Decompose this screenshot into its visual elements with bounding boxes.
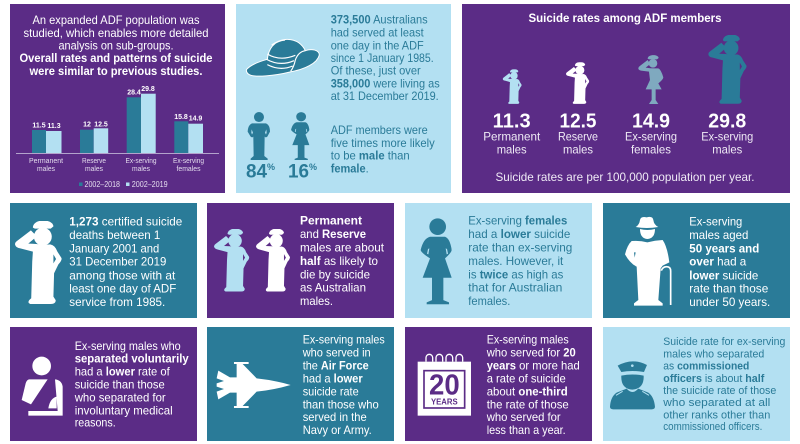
officers text: other ranks other than	[663, 409, 770, 421]
officers text: Suicide rate for ex-serving	[663, 336, 785, 348]
voluntary separation text	[74, 339, 189, 430]
females text: rate than ex-serving	[468, 241, 572, 255]
icon: ex-serving male	[708, 35, 747, 104]
service text: since 1 January 1985.	[331, 51, 434, 65]
panel: served 20 years	[405, 327, 592, 441]
bar chart: Reserve	[82, 156, 106, 165]
deaths text: 31 December 2019	[69, 255, 167, 269]
bar chart: 14.9	[189, 116, 202, 122]
females text: that for Australian	[468, 281, 562, 295]
icon: permanent male	[503, 69, 522, 104]
service length text: Ex-serving males	[487, 332, 569, 346]
officers text	[662, 336, 785, 433]
panel: ADF population facts	[236, 4, 451, 193]
females text: males. However, it	[468, 254, 564, 268]
service text: 358,000 were living as	[331, 76, 440, 90]
service length text	[486, 332, 580, 437]
officers text: males who separated	[663, 348, 764, 360]
bar chart: 15.8	[174, 114, 188, 121]
bar chart: 11.5	[32, 122, 46, 130]
females text: females.	[468, 294, 510, 308]
age text: 50 years and	[689, 241, 759, 255]
rate labels: Permanent	[483, 130, 541, 144]
deaths text: January 2001 and	[69, 241, 159, 255]
officers text: officers is about half	[663, 373, 765, 385]
service length text: less than a year.	[487, 423, 566, 437]
bar chart: Ex-serving	[126, 156, 156, 165]
bar chart: Permanent	[29, 156, 64, 165]
panel: ADF population facts: %	[267, 162, 275, 172]
panel: ex-serving females	[405, 203, 592, 318]
legend	[79, 180, 168, 189]
officers text: as commissioned	[663, 360, 749, 372]
panel: separated voluntarily	[10, 327, 197, 441]
rate labels: Ex-serving	[701, 130, 753, 144]
service text: at 31 December 2019.	[331, 89, 439, 103]
females text	[468, 214, 572, 308]
air force text: served in the	[303, 410, 367, 424]
service text: Of these, just over	[331, 64, 421, 78]
stat: 16 percent: 16	[288, 162, 309, 183]
age text: under 50 years.	[689, 295, 770, 309]
gender text: ADF members were	[331, 123, 428, 137]
comparison text: half as likely to	[300, 254, 378, 268]
bar chart: 12	[83, 122, 91, 128]
voluntary separation text: reasons.	[75, 416, 116, 430]
service length text: who served for	[486, 410, 561, 424]
bar chart: males	[132, 164, 150, 173]
icon: reserve male	[566, 62, 589, 104]
females text: Ex-serving females	[468, 214, 568, 228]
icon: saluting soldier	[15, 220, 62, 304]
rate numbers: 29.8	[708, 110, 746, 132]
comparison text: males.	[300, 294, 333, 308]
gender text: to be male than	[331, 149, 410, 163]
age text: over had a	[689, 255, 747, 269]
service text: had served at least	[331, 26, 424, 40]
rate labels: males	[712, 142, 742, 156]
deaths text: deaths between 1	[69, 228, 161, 242]
panel: males aged 50 and over	[603, 203, 790, 318]
gender text: female.	[331, 161, 369, 175]
service text: 373,500 Australians	[331, 12, 428, 26]
icon: fighter jet	[217, 362, 291, 408]
intro text: Overall rates and patterns of suicide	[20, 51, 213, 65]
icon: permanent soldier	[214, 229, 249, 291]
age text	[689, 215, 770, 309]
air force text: Navy or Army.	[303, 423, 372, 437]
deaths text: among those with at	[69, 268, 176, 282]
icon: 20 years calendar	[418, 354, 471, 416]
service text: one day in the ADF	[331, 38, 424, 52]
rates footnote: Suicide rates are per 100,000 population per year.	[496, 170, 754, 184]
service length text: the rate of those	[487, 397, 569, 411]
panel: certified suicide deaths	[10, 203, 197, 318]
comparison text: males are about	[300, 241, 385, 255]
stat: 84 percent: 84	[246, 162, 267, 183]
rate labels: males	[563, 142, 593, 156]
deaths text	[69, 215, 183, 309]
intro text: analysis on sub-groups.	[58, 38, 174, 52]
service length text: who served for 20	[486, 346, 576, 360]
panel heading: Suicide rates among ADF members	[528, 11, 722, 25]
rate labels: Reserve	[558, 130, 598, 144]
comparison text: as Australian	[300, 281, 366, 295]
panel: commissioned officers	[603, 327, 790, 441]
intro text: An expanded ADF population was	[32, 13, 200, 27]
officers text: who separated at all	[662, 397, 770, 409]
air force text: had a lower	[303, 371, 363, 385]
bar chart: 29.8	[141, 86, 155, 93]
females text: had a lower suicide	[468, 227, 571, 241]
air force text: than those who	[303, 397, 379, 411]
voluntary separation text: who separated for	[74, 390, 166, 404]
rate numbers: 11.3	[493, 110, 531, 132]
air force text: who served in	[302, 346, 371, 360]
comparison text: and Reserve	[300, 227, 366, 241]
age text: rate than those	[689, 282, 769, 296]
voluntary separation text: Ex-serving males who	[75, 339, 181, 353]
bar chart: 28.4	[127, 90, 141, 96]
gender text	[331, 123, 435, 175]
rate numbers: 12.5	[560, 110, 596, 132]
bar chart: males	[85, 164, 103, 173]
deaths text: least one day of ADF	[69, 282, 176, 296]
bar chart	[16, 86, 219, 173]
panel: suicide rates among ADF members	[462, 4, 790, 193]
females text: is twice as high as	[468, 267, 563, 281]
service text	[331, 12, 440, 103]
rate numbers	[493, 110, 746, 132]
intro text	[20, 13, 213, 78]
panel: air force	[207, 327, 394, 441]
panel: expanded ADF population chart	[10, 4, 225, 193]
deaths text: service from 1985.	[69, 295, 165, 309]
age text: Ex-serving	[689, 215, 742, 229]
age text: lower suicide	[689, 268, 759, 282]
air force text	[302, 332, 385, 437]
air force text: the Air Force	[303, 358, 369, 372]
service length text: a rate of suicide	[487, 371, 566, 385]
officers text: the suicide rate of those	[663, 385, 776, 397]
voluntary separation text: had a lower rate of	[75, 365, 170, 379]
voluntary separation text: suicide than those	[75, 377, 165, 391]
comparison text	[300, 214, 385, 308]
panel: permanent and reserve males	[207, 203, 394, 318]
icon: officer	[610, 361, 655, 409]
officers text: commissioned officers.	[663, 421, 762, 433]
bar chart: females	[176, 164, 201, 173]
bar chart: Ex-serving	[173, 156, 204, 165]
deaths text: 1,273 certified suicide	[69, 215, 183, 229]
icon: female figure	[291, 112, 309, 160]
panel: ADF population facts: %	[309, 162, 317, 172]
bar chart: males	[37, 164, 55, 173]
gender text: five times more likely	[331, 136, 435, 150]
icon: older man with cane	[625, 217, 671, 306]
voluntary separation text: separated voluntarily	[75, 352, 189, 366]
rate labels: males	[497, 142, 527, 156]
intro text: were similar to previous studies.	[29, 64, 203, 78]
voluntary separation text: involuntary medical	[75, 403, 173, 417]
icon: male figure	[248, 112, 270, 160]
rate labels	[483, 130, 753, 156]
icon: reserve soldier	[256, 229, 290, 291]
legend: 2002–2018	[84, 180, 120, 189]
intro text: studied, which enables more detailed	[24, 26, 208, 40]
icon: 20 years calendar: 20	[429, 370, 460, 402]
comparison text: Permanent	[300, 214, 362, 228]
service length text: about one-third	[487, 384, 568, 398]
icon: 20 years calendar: YEARS	[431, 397, 458, 407]
age text: males aged	[689, 228, 748, 242]
bar chart: 12.5	[94, 122, 108, 128]
rate labels: females	[631, 142, 671, 156]
air force text: suicide rate	[303, 384, 359, 398]
comparison text: die by suicide	[300, 267, 370, 281]
service length text: years or more had	[487, 358, 580, 372]
bar chart: 11.3	[47, 123, 61, 130]
icon: ex-serving female	[638, 55, 663, 104]
icon: person with arm sling	[22, 357, 63, 416]
air force text: Ex-serving males	[303, 332, 385, 346]
icon: female figure	[421, 218, 452, 304]
rate numbers: 14.9	[632, 110, 670, 132]
icon: slouch hat	[246, 39, 319, 76]
legend: 2002–2019	[132, 180, 168, 189]
rate labels: Ex-serving	[625, 130, 677, 144]
